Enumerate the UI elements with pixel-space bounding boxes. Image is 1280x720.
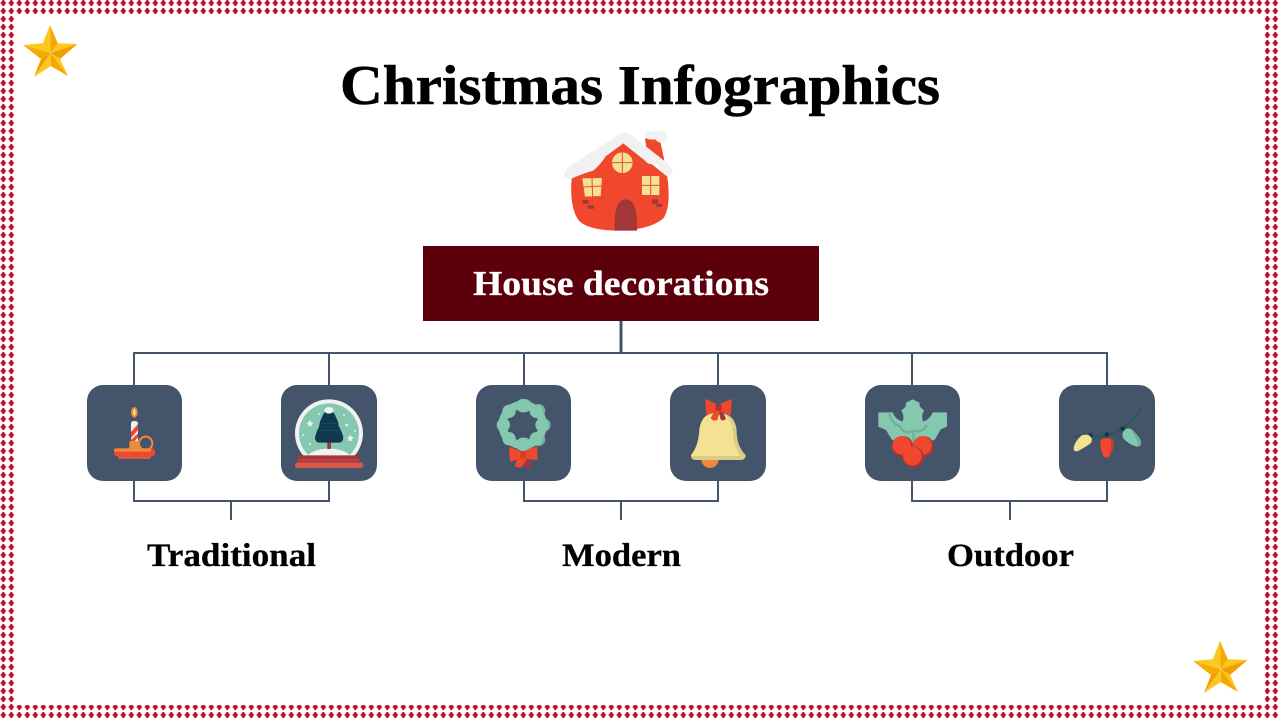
icon: wreath with bow — [497, 399, 551, 468]
title: Christmas Infographics — [340, 55, 940, 117]
tile: holly — [865, 385, 960, 481]
tile: wreath — [476, 385, 571, 481]
label: Traditional: Traditional — [147, 538, 316, 574]
header box: House decorations: House decorations — [473, 264, 769, 303]
connector bracket: Modern — [524, 481, 718, 520]
connector bracket: Outdoor — [912, 481, 1107, 520]
icon: snow globe — [295, 399, 363, 468]
connector lines: top tree — [134, 321, 1107, 385]
icon: gold star bottom right — [1193, 641, 1248, 693]
connector bracket: Traditional — [134, 481, 329, 520]
label: Outdoor: Outdoor — [947, 538, 1074, 574]
icon: bell with bow — [691, 400, 746, 468]
label: Modern: Modern — [562, 538, 681, 574]
icon: holly and berries — [878, 399, 947, 468]
tile: candle — [87, 385, 182, 481]
icon: candle — [114, 407, 155, 459]
icon: red snowy house — [564, 131, 673, 231]
tile: bell — [670, 385, 766, 481]
tile: snow globe — [281, 385, 377, 481]
icon: string lights — [1073, 408, 1142, 458]
icon: gold star top left — [23, 25, 78, 77]
header box: House decorations — [423, 246, 819, 321]
tile: string lights — [1059, 385, 1155, 481]
